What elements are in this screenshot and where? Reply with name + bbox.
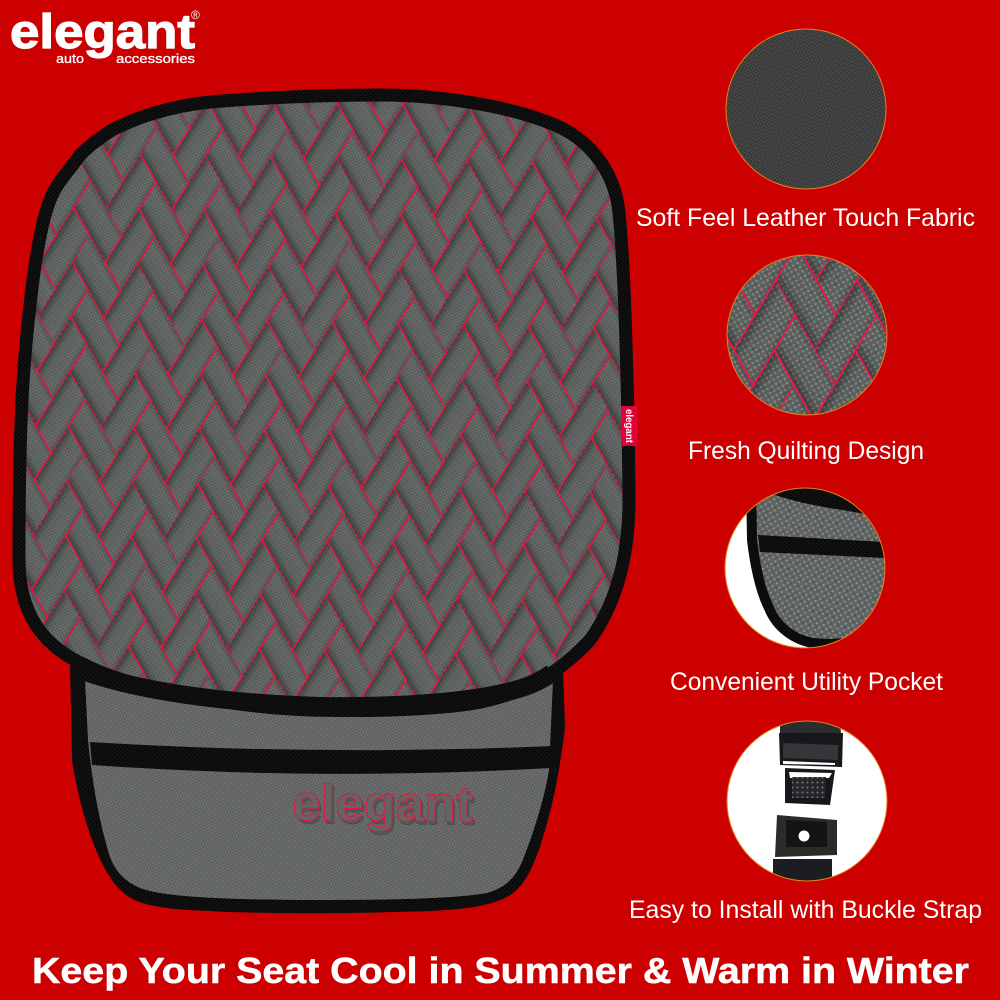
brand logo: auto: [56, 51, 84, 66]
red brand tag: elegant: [623, 409, 634, 444]
quilted seat pad: [19, 95, 629, 710]
red brand tag: [621, 406, 637, 446]
feature: quilting: [688, 255, 924, 465]
buckle circle: [727, 720, 887, 882]
label: Fresh Quilting Design: [688, 437, 924, 465]
lower seat binding: [75, 668, 552, 706]
pocket circle: [725, 480, 890, 648]
brand logo: accessories: [116, 51, 196, 66]
brand logo: elegant: [10, 6, 195, 59]
fabric circle: [726, 29, 886, 189]
label: Convenient Utility Pocket: [670, 668, 943, 696]
seat cushion product: [19, 95, 637, 913]
feature: pocket: [670, 480, 943, 696]
embroidered logo: elegant: [294, 777, 475, 836]
label: Soft Feel Leather Touch Fabric: [636, 204, 975, 232]
feature: leather fabric: [636, 29, 975, 232]
pocket strap: [90, 742, 553, 774]
bottom headline: Keep Your Seat Cool in Summer & Warm in Winter: [32, 950, 969, 991]
quilting circle: [727, 255, 887, 415]
lower flap with utility pocket: [70, 665, 565, 913]
brand logo: ®: [191, 8, 200, 22]
label: Easy to Install with Buckle Strap: [629, 896, 982, 924]
embroidered logo: elegant: [292, 774, 473, 833]
feature: buckle: [629, 720, 982, 924]
